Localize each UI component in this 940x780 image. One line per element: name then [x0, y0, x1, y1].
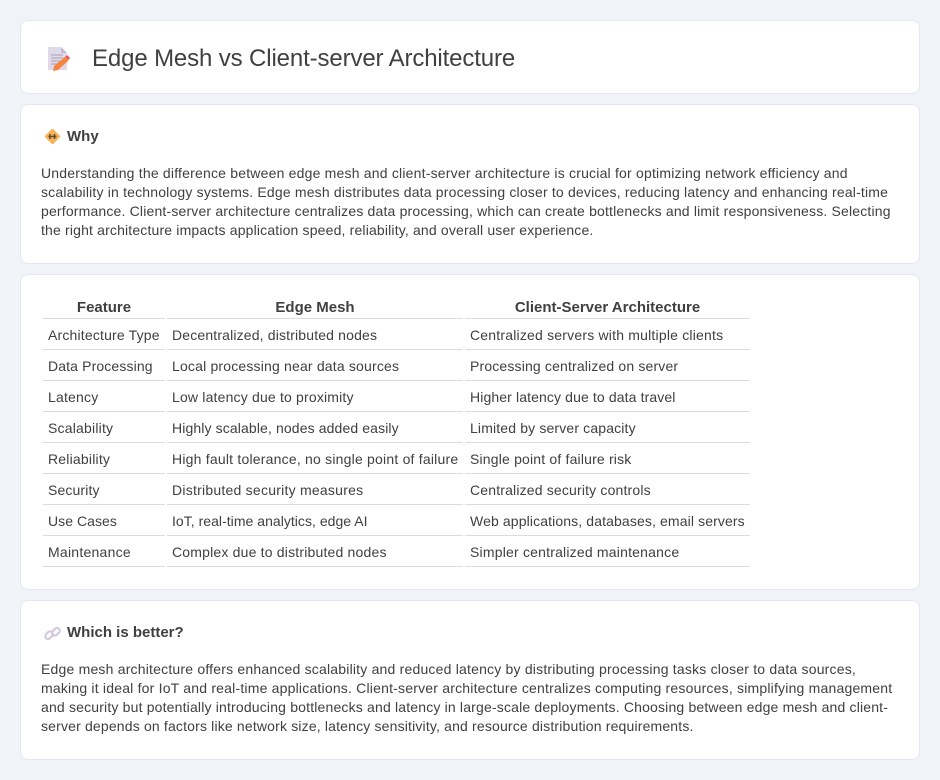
panel: which is better: and security but potentially introducing bottlenecks and latency in large-scale deployments. Choosing between edge mesh and client- [41, 699, 888, 715]
panel: which is better: Edge mesh architecture offers enhanced scalability and reduced latency by distributing processing tasks closer to data sources, [41, 661, 856, 677]
comparison table: Latency [48, 389, 98, 405]
text block: why [41, 165, 891, 238]
heading: why: Why [67, 128, 99, 145]
panel: why: scalability in technology systems. Edge mesh distributes data processing closer to devices, reducing latency and enhancing real-time [41, 184, 888, 200]
panel: why [20, 104, 920, 264]
comparison table: Centralized servers with multiple clients [470, 327, 723, 343]
comparison table: Simpler centralized maintenance [470, 544, 679, 560]
comparison table [43, 299, 750, 567]
text block: which is better [41, 661, 892, 734]
comparison table: Maintenance [48, 544, 131, 560]
comparison table: Edge Mesh [275, 299, 355, 316]
comparison table: Feature [77, 299, 131, 316]
panel: which is better: server depends on factors like network size, latency sensitivity, and resource distribution requirements. [41, 718, 694, 734]
comparison table: Architecture Type [48, 327, 160, 343]
panel: why: performance. Client-server architecture centralizes data processing, which can create bottlenecks and limit responsiveness. Selecting [41, 203, 891, 219]
icon: document with pencil [48, 47, 70, 71]
comparison table: Low latency due to proximity [172, 389, 354, 405]
comparison table: Centralized security controls [470, 482, 651, 498]
comparison table: Client-Server Architecture [515, 299, 700, 316]
comparison table: Reliability [48, 451, 110, 467]
comparison table: Web applications, databases, email servers [470, 513, 745, 529]
comparison table: Limited by server capacity [470, 420, 636, 436]
panel: why: the right architecture impacts application speed, reliability, and overall user experience. [41, 222, 593, 238]
comparison table: Higher latency due to data travel [470, 389, 676, 405]
comparison table: Complex due to distributed nodes [172, 544, 387, 560]
panel: title card [20, 20, 920, 94]
panel: which is better [20, 600, 920, 760]
comparison table: Use Cases [48, 513, 117, 529]
panel: comparison table [20, 274, 920, 590]
comparison table: Highly scalable, nodes added easily [172, 420, 399, 436]
comparison table: High fault tolerance, no single point of failure [172, 451, 458, 467]
panel: why: Understanding the difference between edge mesh and client-server architecture is crucial for optimizing network efficiency and [41, 165, 848, 181]
comparison table: Processing centralized on server [470, 358, 678, 374]
comparison table: Single point of failure risk [470, 451, 631, 467]
comparison table: IoT, real-time analytics, edge AI [172, 513, 368, 529]
table rows [48, 327, 745, 560]
icon: chain link [44, 626, 61, 640]
icon: warning diamond [44, 128, 60, 144]
comparison table: Data Processing [48, 358, 153, 374]
comparison table: Distributed security measures [172, 482, 363, 498]
comparison table: Security [48, 482, 100, 498]
heading: which is better: Which is better? [67, 624, 184, 641]
panel: which is better: making it ideal for IoT and real-time applications. Client-server architecture centralizes computing resources, simplifying management [41, 680, 892, 696]
comparison table: Local processing near data sources [172, 358, 399, 374]
comparison table: Scalability [48, 420, 113, 436]
table header [77, 299, 700, 316]
comparison table: Decentralized, distributed nodes [172, 327, 377, 343]
title: Edge Mesh vs Client-server Architecture [92, 45, 515, 72]
